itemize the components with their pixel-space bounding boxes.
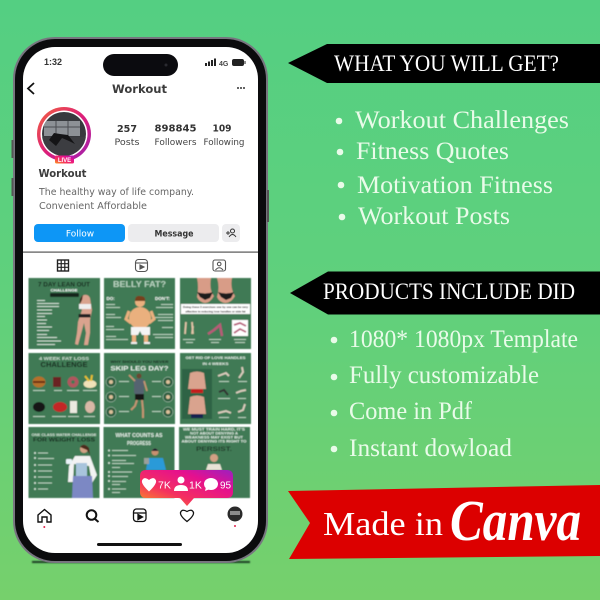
likes: 7K	[158, 480, 171, 492]
post: belly fat	[104, 278, 175, 349]
item: motivation fitness: Motivation Fitness	[357, 170, 553, 199]
stat: following: 109	[212, 124, 232, 134]
stat: following: Following	[204, 138, 244, 148]
post: quote: WE MUST TRAIN HARD, IT'S	[183, 428, 246, 432]
phone shadow	[32, 561, 250, 563]
home indicator	[97, 543, 182, 546]
profile name: Workout	[38, 168, 86, 180]
cartoon man	[126, 296, 154, 344]
stat: posts	[114, 124, 140, 148]
post: quote: PERSIST.	[196, 447, 232, 453]
nav icon: profile	[228, 506, 242, 527]
dynamic island	[103, 54, 178, 76]
banner: what you will get	[288, 44, 600, 83]
list: what you will get	[336, 105, 569, 230]
profile title: Workout	[112, 82, 167, 96]
stat: posts: Posts	[114, 138, 140, 148]
banner: products include: PRODUCTS INCLUDE DID	[323, 279, 575, 304]
post: love handles: GET RID OF LOVE HANDLES	[186, 355, 246, 360]
post: quote	[179, 427, 250, 498]
post: 4 week fat loss: CHALLENGE	[40, 362, 88, 369]
followers: 1K	[189, 480, 202, 492]
item: workout posts: Workout Posts	[358, 201, 510, 230]
post: quote: WEAKNESS MAY EXIST BUT	[185, 436, 244, 440]
post: belly fat: DON'T:	[155, 296, 170, 301]
phone body	[12, 37, 269, 563]
stat: followers: Followers	[154, 138, 197, 148]
post: skip leg day: WHY SHOULD YOU NEVER	[110, 359, 169, 364]
tab icon: reels	[136, 260, 148, 272]
item: customizable: Fully customizable	[349, 360, 539, 389]
nav icon: search	[87, 510, 98, 522]
post: love handles exercise: effective in reducing love handles or side fat	[186, 310, 246, 314]
post grid	[28, 278, 251, 498]
post: progress: WHAT COUNTS AS	[116, 433, 163, 439]
nav icon: reels	[134, 509, 146, 522]
post: quote: NOT ABOUT DENYING A	[190, 432, 238, 436]
status bar icons: 4G	[219, 61, 229, 68]
post: progress	[104, 427, 174, 498]
post: love handles exercise: Doing these 3 exercises one by one can be very	[183, 305, 248, 309]
message button: Message	[154, 230, 194, 240]
avatar	[37, 107, 91, 164]
stat: followers	[154, 124, 197, 148]
item: workout challenges: Workout Challenges	[355, 105, 569, 134]
follow button	[34, 224, 125, 242]
banner: products include	[290, 272, 600, 314]
profile bio	[38, 187, 194, 212]
banner: what you will get: WHAT YOU WILL GET?	[334, 51, 559, 76]
phone screen	[23, 47, 258, 553]
post: skip leg day: SKIP LEG DAY?	[110, 366, 169, 372]
nav icon: heart	[180, 510, 194, 522]
item: fitness quotes: Fitness Quotes	[356, 136, 509, 165]
post: 4 week fat loss: 4 WEEK FAT LOSS	[39, 356, 89, 361]
comments: 95	[220, 480, 232, 492]
nav icon: home	[38, 510, 51, 528]
post: 4 week fat loss	[28, 353, 100, 424]
item: pdf: Come in Pdf	[349, 396, 472, 425]
post: belly fat: BELLY FAT?	[113, 280, 166, 289]
stat: following	[204, 124, 244, 148]
profile bio: The healthy way of life company.	[38, 187, 194, 198]
post: quote: ABOUT DENYING ITS RIGHT TO	[182, 440, 247, 444]
phone mockup	[12, 37, 269, 563]
live badge: LIVE	[58, 158, 71, 164]
item: template size: 1080* 1080px Template	[349, 324, 578, 353]
post: belly fat: DO:	[106, 296, 115, 301]
status bar time: 1:32	[44, 57, 62, 67]
list: products include	[331, 324, 578, 462]
post: skip leg day	[104, 353, 175, 424]
stat: followers: 898845	[154, 124, 197, 134]
post: love handles	[180, 353, 251, 424]
profile bio: Convenient Affordable	[39, 201, 147, 212]
engagement badge	[140, 470, 233, 506]
add person button	[222, 224, 240, 242]
post: 7 day lean out: 7 DAY LEAN OUT	[38, 282, 90, 288]
ribbon: made in canva	[288, 485, 600, 559]
post: 7 day lean out: CHALLENGE	[50, 288, 78, 292]
post: love handles: IN 4 WEEKS	[202, 361, 229, 366]
post: progress: PROGRESS	[127, 441, 152, 447]
profile divider	[23, 252, 258, 253]
status bar icons	[205, 58, 246, 68]
item: download: Instant dowload	[349, 433, 512, 462]
back arrow	[28, 83, 34, 94]
tab icon: grid	[58, 260, 68, 271]
post: 7 day lean out	[28, 278, 100, 349]
ribbon: made in canva: Made in	[323, 506, 443, 543]
follow button: Follow	[66, 230, 94, 240]
post: water challenge	[28, 427, 100, 498]
post: water challenge: ONE CLASS WATER CHALLENGE	[32, 433, 97, 437]
post: water challenge: FOR WEIGHT LOSS	[33, 438, 96, 444]
message button	[128, 224, 219, 242]
stat: posts: 257	[117, 124, 137, 135]
post: love handles exercise	[180, 278, 251, 349]
tab icon: tagged	[213, 260, 226, 271]
more dots	[237, 87, 245, 89]
